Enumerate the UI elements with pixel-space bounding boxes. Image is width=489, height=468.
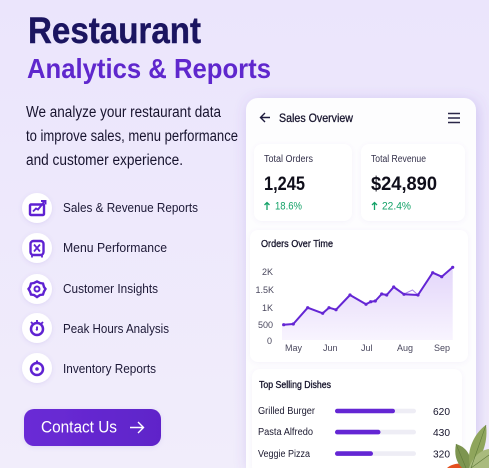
chart card: orders over time bbox=[250, 230, 468, 362]
icon: arrow right bbox=[130, 422, 144, 433]
title: Analytics & Reports bbox=[27, 53, 271, 84]
y axis labels: 1K bbox=[262, 303, 273, 313]
row: pasta alfredo: Pasta Alfredo bbox=[258, 427, 313, 438]
item: inventory reports: Inventory Reports bbox=[63, 361, 156, 376]
panel: phone dashboard bbox=[246, 98, 476, 468]
item: inventory reports bbox=[22, 353, 156, 383]
y axis labels: 1.5K bbox=[255, 285, 274, 295]
x axis labels bbox=[285, 343, 450, 353]
intro text: to improve sales, menu performance bbox=[26, 128, 238, 145]
item: customer insights bbox=[22, 274, 158, 304]
y axis labels: 2K bbox=[262, 267, 273, 277]
kpi card: total orders: 18.6% bbox=[275, 200, 302, 212]
y axis labels bbox=[255, 267, 274, 346]
header bar bbox=[260, 111, 460, 125]
row: veggie pizza bbox=[258, 448, 450, 460]
item: peak hours analysis: Peak Hours Analysis bbox=[63, 321, 169, 336]
item: menu performance bbox=[22, 233, 167, 263]
contact button bbox=[24, 409, 161, 446]
kpi card: total revenue: $24,890 bbox=[371, 173, 437, 195]
x axis labels: Aug bbox=[397, 343, 413, 353]
title bbox=[27, 10, 271, 84]
header bar: Sales Overview bbox=[279, 111, 353, 125]
x axis labels: Jun bbox=[323, 343, 338, 353]
kpi card: total orders: 1,245 bbox=[264, 173, 305, 195]
area and line bbox=[282, 266, 454, 340]
row: grilled burger: 620 bbox=[433, 406, 450, 418]
y axis labels: 0 bbox=[267, 336, 272, 346]
x axis labels: Sep bbox=[434, 343, 450, 353]
x axis labels: May bbox=[285, 343, 303, 353]
x axis labels: Jul bbox=[361, 343, 373, 353]
row: grilled burger bbox=[258, 406, 450, 418]
row: veggie pizza: 320 bbox=[433, 448, 450, 460]
contact button: Contact Us bbox=[41, 418, 117, 436]
chart card: orders over time: Orders Over Time bbox=[261, 239, 333, 250]
row: pasta alfredo: 430 bbox=[433, 427, 450, 439]
y axis labels: 500 bbox=[258, 320, 273, 330]
illustration: leaves and tomato bbox=[447, 425, 489, 468]
intro text: We analyze your restaurant data bbox=[26, 104, 221, 121]
feature list bbox=[22, 193, 198, 383]
kpi card: total revenue bbox=[361, 144, 465, 221]
intro text: and customer experience. bbox=[26, 152, 183, 169]
row: pasta alfredo bbox=[258, 427, 450, 439]
row: veggie pizza: Veggie Pizza bbox=[258, 449, 310, 460]
list card: top selling dishes bbox=[252, 369, 462, 468]
intro text bbox=[26, 104, 238, 169]
item: sales and revenue reports: Sales & Revenue Reports bbox=[63, 200, 198, 215]
item: peak hours analysis bbox=[22, 313, 169, 343]
item: sales and revenue reports bbox=[22, 193, 198, 223]
kpi card: total revenue: 22.4% bbox=[382, 200, 411, 212]
kpi card: total revenue: Total Revenue bbox=[371, 154, 426, 165]
kpi card: total orders bbox=[254, 144, 352, 221]
kpi card: total orders: Total Orders bbox=[264, 154, 313, 165]
list card: top selling dishes: Top Selling Dishes bbox=[259, 380, 331, 391]
item: menu performance: Menu Performance bbox=[63, 240, 167, 255]
item: customer insights: Customer Insights bbox=[63, 281, 158, 296]
title: Restaurant bbox=[28, 10, 201, 51]
row: grilled burger: Grilled Burger bbox=[258, 406, 316, 417]
